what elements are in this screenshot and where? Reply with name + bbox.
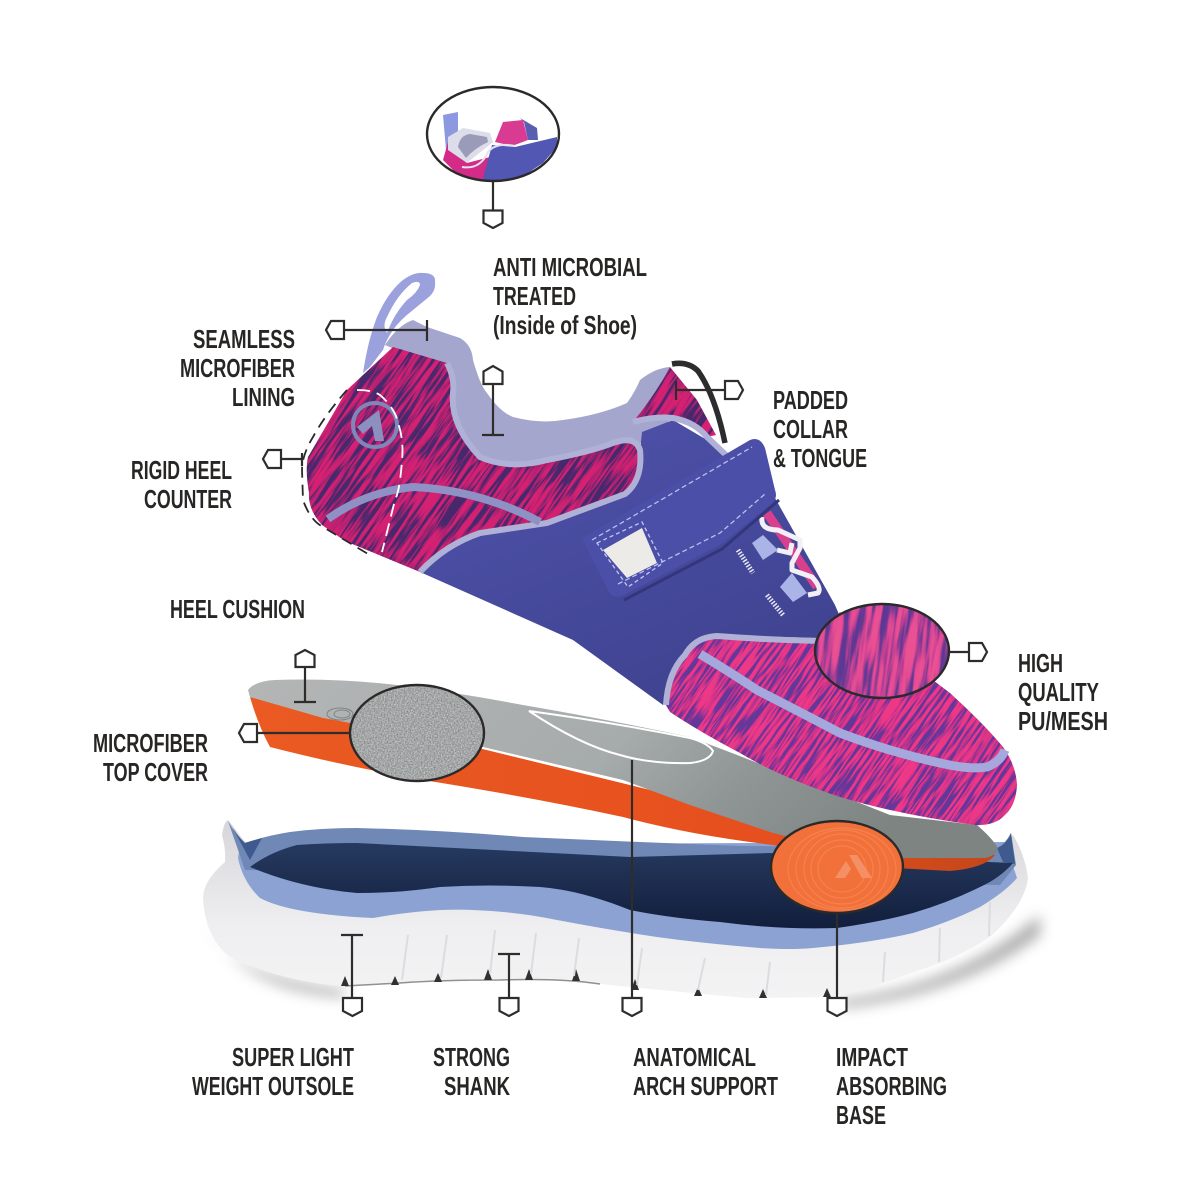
heel logo [353, 403, 397, 447]
callout: mesh marker [949, 643, 987, 661]
text: seamless lining: LINING [232, 382, 295, 412]
heel arc band [328, 487, 540, 522]
text: impact base [836, 1042, 947, 1130]
text: anti microbial [493, 252, 647, 340]
text: seamless lining: MICROFIBER [180, 353, 295, 383]
text: arch support: ANATOMICAL [633, 1042, 756, 1072]
lace strip and laces [738, 513, 819, 615]
outsole assembly [203, 820, 1028, 998]
text: heel cushion: HEEL CUSHION [170, 594, 305, 624]
text: shank: STRONG [433, 1042, 510, 1072]
insole heel logo rings [327, 708, 353, 720]
navy footbed [250, 843, 1013, 928]
text: padded collar: COLLAR [773, 414, 848, 444]
strap white patch [603, 528, 657, 578]
blue rim [228, 821, 1016, 885]
callout: shank marker [498, 954, 520, 1016]
heel mesh [306, 347, 638, 572]
text: rigid heel counter: RIGID HEEL [131, 455, 232, 485]
insole grey top cover [248, 680, 998, 858]
arch outline [529, 711, 713, 763]
text: anti microbial: ANTI MICROBIAL [493, 252, 647, 282]
body leather [420, 420, 850, 705]
outsole tread notches [341, 969, 831, 998]
text: seamless lining [180, 324, 295, 412]
tongue trim [633, 418, 726, 455]
text: microfiber top cover: TOP COVER [103, 757, 208, 787]
text: seamless lining: SEAMLESS [193, 324, 295, 354]
magnifier: inside of shoe [427, 87, 559, 182]
callout: outsole marker [341, 935, 363, 1016]
text: high quality [1018, 648, 1108, 736]
outsole white base [203, 820, 1028, 998]
inner white dashes [357, 390, 402, 552]
callout: anti microbial marker [482, 182, 504, 435]
text: microfiber top cover [93, 728, 208, 787]
magnifier: top cover felt [350, 685, 485, 781]
text: high quality: HIGH [1018, 648, 1063, 678]
insole orange foam [250, 697, 995, 871]
callout: heel cushion marker [294, 650, 316, 702]
text: arch support: ARCH SUPPORT [633, 1071, 778, 1101]
tongue mesh [636, 367, 716, 436]
pull tab [363, 273, 435, 373]
text: padded collar: PADDED [773, 385, 848, 415]
text: outsole [192, 1042, 354, 1101]
text: padded collar: & TONGUE [773, 443, 867, 473]
outsole ground edge [345, 980, 600, 986]
toe trim [666, 636, 820, 705]
rigid heel counter dashes [302, 390, 373, 557]
black tongue binding [672, 363, 725, 443]
text: shank [433, 1042, 510, 1101]
text: rigid heel counter [131, 455, 232, 514]
text: impact base: ABSORBING [836, 1071, 947, 1101]
text: microfiber top cover: MICROFIBER [93, 728, 208, 758]
eyelet tabs [752, 535, 807, 602]
callout: padded collar marker [676, 381, 743, 400]
strap stitch box [597, 522, 663, 587]
lining [385, 320, 690, 470]
text: outsole: WEIGHT OUTSOLE [192, 1071, 354, 1101]
text: outsole: SUPER LIGHT [232, 1042, 354, 1072]
shoe upper [264, 86, 1017, 1016]
callout: seamless lining marker [326, 320, 427, 341]
text: arch support [633, 1042, 778, 1101]
text: anti microbial: TREATED [493, 281, 576, 311]
strap [582, 439, 779, 600]
text: impact base: IMPACT [836, 1042, 908, 1072]
heel trim [420, 363, 640, 572]
text: anti microbial: (Inside of Shoe) [493, 310, 637, 340]
insole [248, 680, 998, 871]
lavender midsole band [238, 842, 1017, 949]
text: padded collar [773, 385, 867, 473]
magnifier: impact base [771, 821, 903, 913]
text: high quality: QUALITY [1018, 677, 1099, 707]
toe band [700, 654, 1005, 768]
text: impact base: BASE [836, 1100, 886, 1130]
text: high quality: PU/MESH [1018, 706, 1108, 736]
callout: impact marker [828, 913, 846, 1016]
text: rigid heel counter: COUNTER [144, 484, 232, 514]
magnifier: mesh [814, 602, 950, 700]
text: shank: SHANK [444, 1071, 510, 1101]
outsole shadow [208, 915, 1040, 1008]
callout: microfiber marker [239, 724, 351, 742]
callout: arch marker [622, 760, 642, 1016]
callout: rigid heel marker [263, 450, 302, 468]
toe mesh [663, 612, 1017, 826]
